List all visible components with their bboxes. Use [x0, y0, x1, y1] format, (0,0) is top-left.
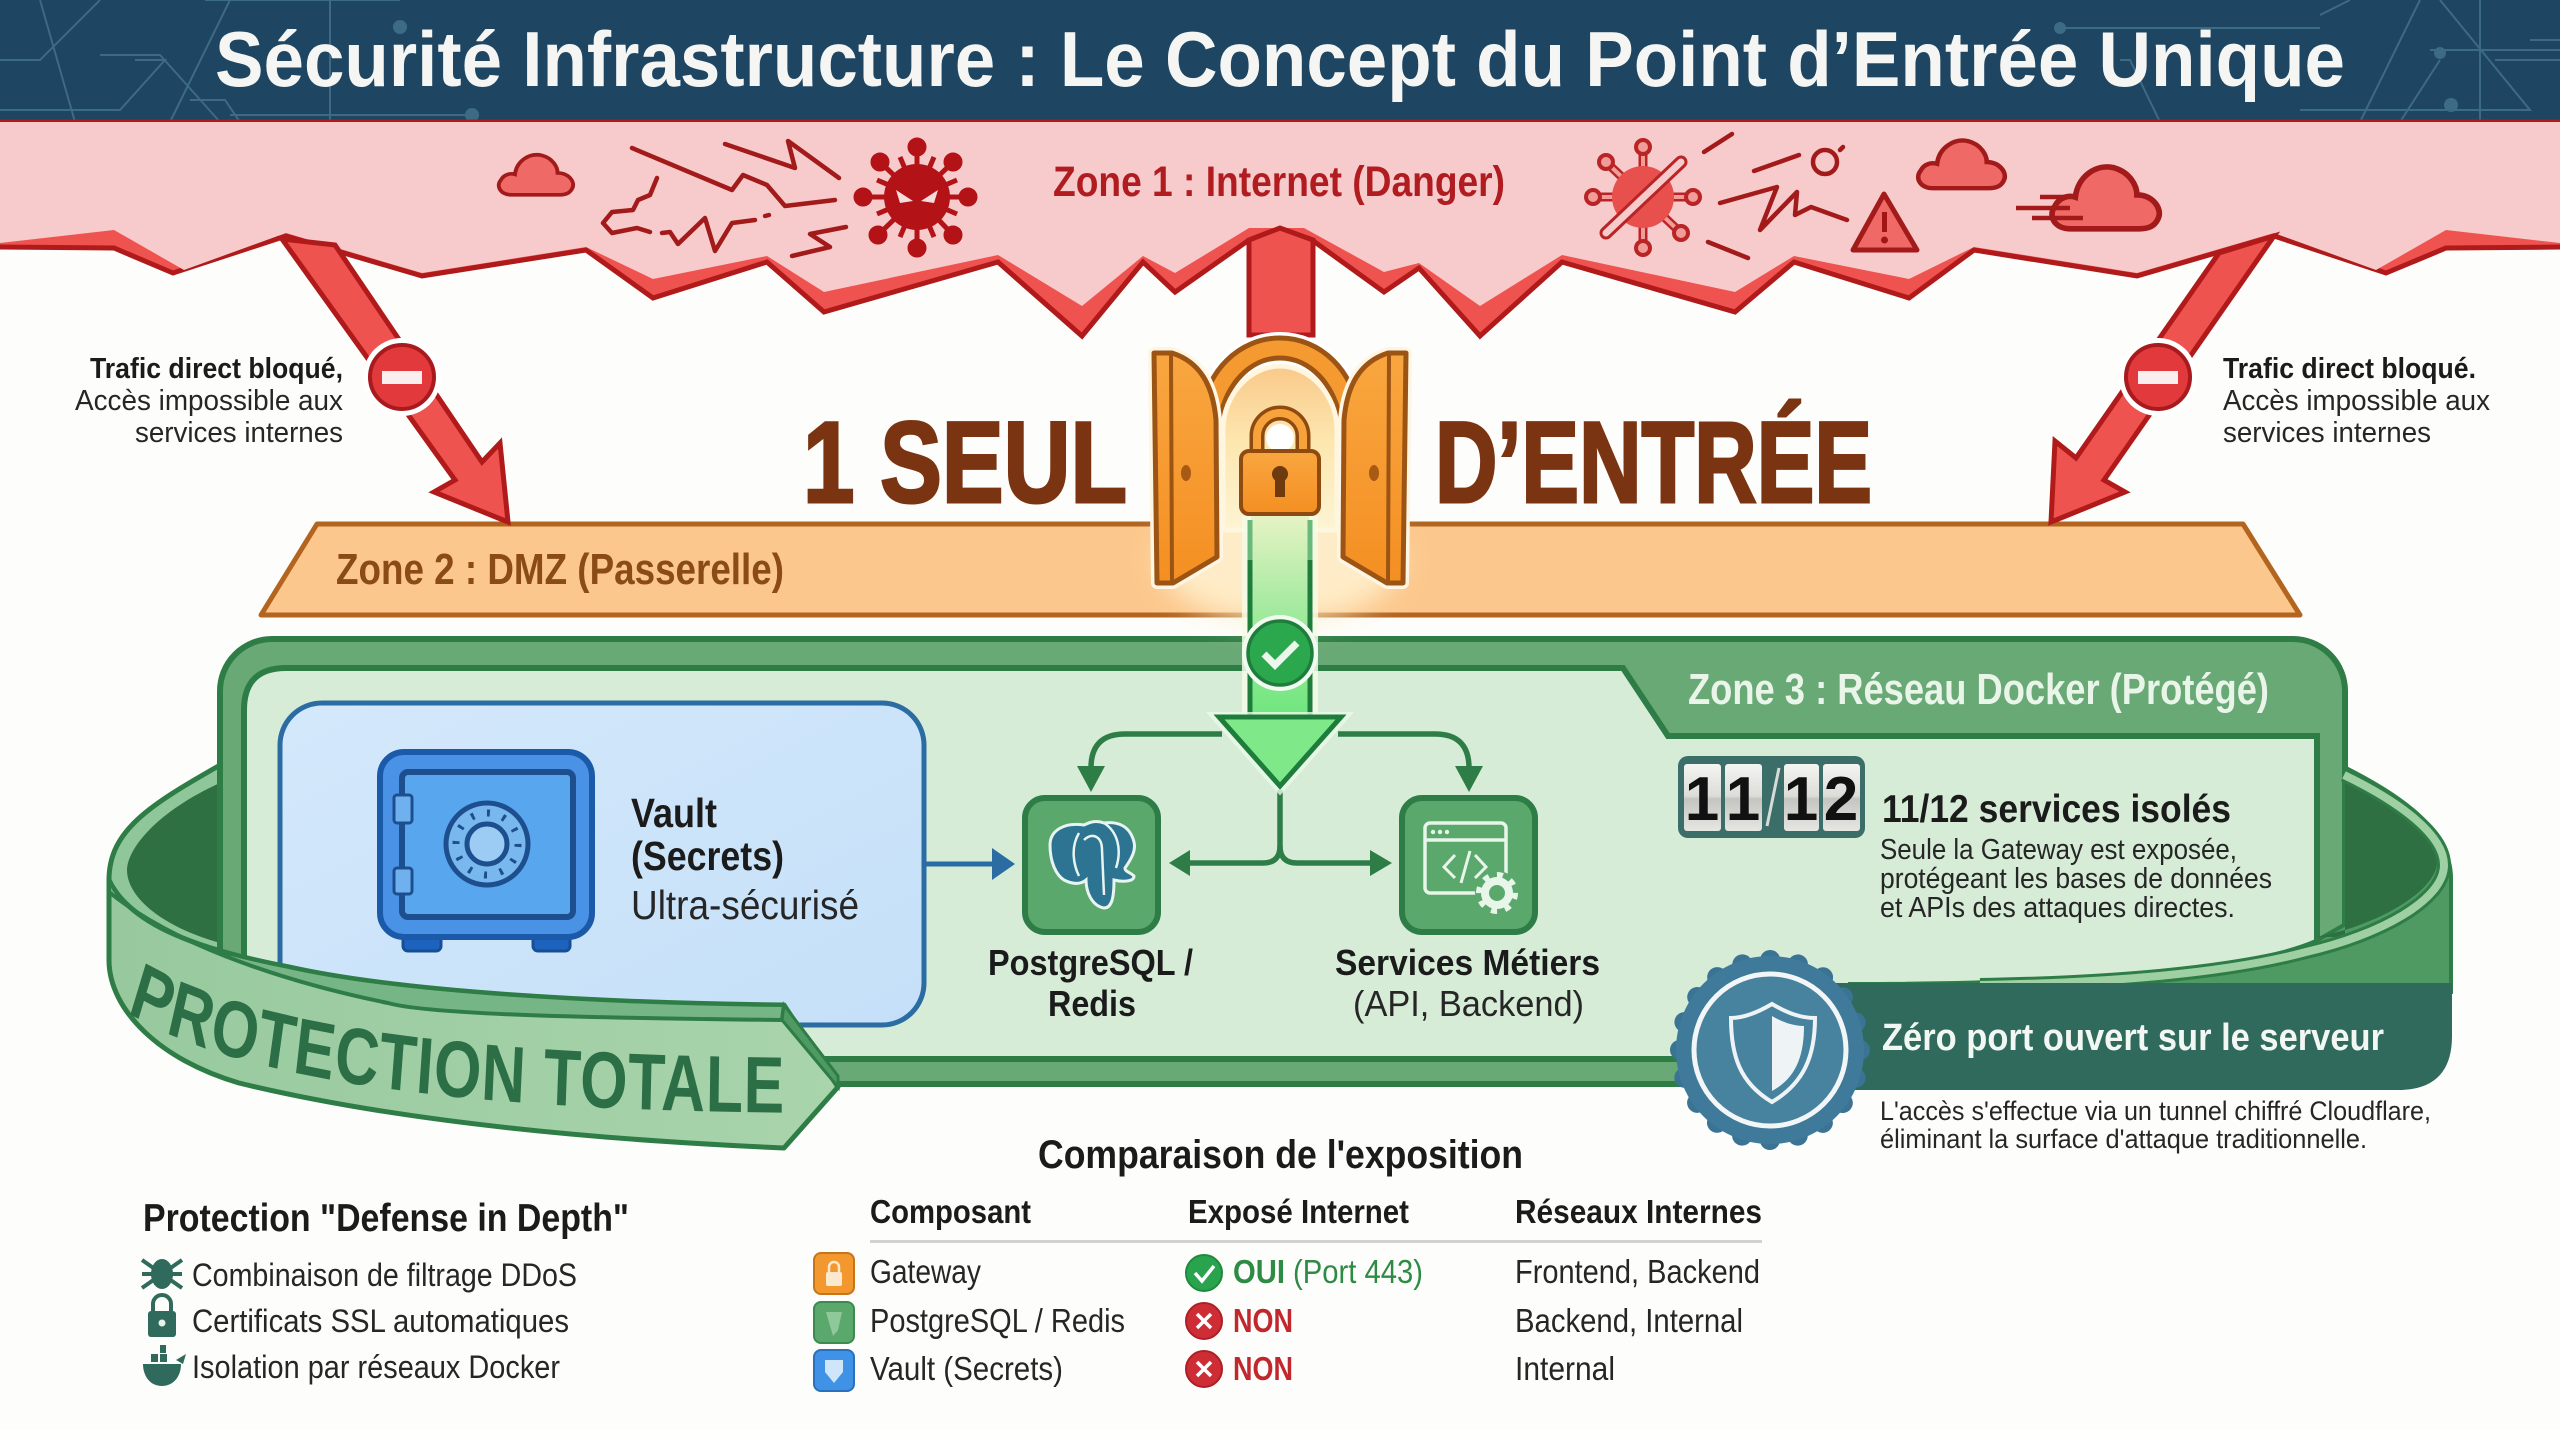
text: services isolated: Seule la Gateway est exposée,: [1880, 834, 2237, 866]
text: zero port: Zéro port ouvert sur le serveur: [1882, 1017, 2384, 1059]
band body: [1850, 767, 2451, 992]
icon: attack lightning scribbles left: [603, 141, 846, 256]
lock: [1257, 413, 1303, 452]
arch white halo: [1200, 338, 1360, 420]
row: gateway: OUI (Port 443): [1233, 1253, 1423, 1290]
icon: ddos filter: [142, 1259, 182, 1289]
text: vault label: [631, 790, 859, 928]
icon: check badge: [1242, 615, 1318, 691]
text: blocked note right: Accès impossible aux: [2223, 385, 2490, 417]
door halo: [1154, 353, 1217, 583]
row: postgres: PostgreSQL / Redis: [870, 1302, 1125, 1339]
arch: [1200, 338, 1360, 420]
glow inside gateway: [1160, 498, 1400, 622]
panel: vault: [280, 703, 924, 1025]
text: vault label: (Secrets): [631, 833, 784, 879]
row: vault: Vault (Secrets): [870, 1350, 1063, 1387]
arrow: blocked traffic right: [2051, 236, 2274, 522]
heading: 1 seul: 1 SEUL: [803, 399, 1127, 527]
icon: docker whale: [143, 1345, 186, 1386]
text: tunnel note: [1880, 1096, 2431, 1154]
text: services label: (API, Backend): [1353, 983, 1584, 1024]
text: postgres label: Redis: [1048, 983, 1136, 1024]
row: gateway: Gateway: [870, 1253, 981, 1290]
icon: no entry right: [2119, 338, 2197, 416]
text: blocked note right: Trafic direct bloqué.: [2223, 353, 2476, 385]
table header: [870, 1193, 1762, 1243]
text: vault label: Vault: [631, 790, 717, 836]
text: services isolated: [1880, 788, 2272, 924]
panel: zone 3 frame and back ribbon: [109, 639, 2345, 1084]
text: docker: Isolation par réseaux Docker: [192, 1349, 560, 1385]
icon: no entry left: [363, 338, 441, 416]
arch inner glow: [1223, 366, 1337, 530]
text: services label: [1335, 942, 1600, 1024]
row: vault: NON: [1233, 1350, 1293, 1387]
text: vault label: Ultra-sécurisé: [631, 882, 859, 928]
row: postgres: NON: [1233, 1302, 1293, 1339]
icon: shield badge: [1676, 956, 1864, 1144]
icon: flip counter 11/12: 1: [1726, 765, 1760, 834]
icon: code window and gear: [1425, 823, 1519, 915]
panel: zero port band: [1800, 983, 2452, 1090]
ribbon: protection totale front band: [106, 880, 840, 1150]
arrow: central red entry: [1249, 228, 1313, 335]
icon: flip counter 11/12: [1678, 756, 1865, 838]
text: postgres label: PostgreSQL /: [988, 942, 1193, 983]
arrow: green connectors: [1077, 734, 1483, 876]
arrow: green entry head: [1217, 717, 1343, 788]
icon: warning triangle: [1853, 194, 1917, 250]
heading: zone 2: Zone 2 : DMZ (Passerelle): [336, 545, 784, 594]
ribbon: right sweep: [1850, 767, 2451, 992]
row: postgres: [814, 1302, 1743, 1343]
icon: flip counter 11/12: 2: [1824, 765, 1858, 834]
row: postgres: Backend, Internal: [1515, 1302, 1743, 1339]
table: comparison: [814, 1193, 1762, 1391]
icon: elephant: [1050, 822, 1135, 908]
table header: Exposé Internet: [1188, 1193, 1409, 1230]
row: vault: Internal: [1515, 1350, 1615, 1387]
panel: services: [1335, 798, 1600, 1024]
heading: d'entrée: D’ENTRÉE: [1435, 399, 1872, 527]
text: tunnel note: éliminant la surface d'attaque traditionnelle.: [1880, 1124, 2367, 1154]
door right: [1343, 353, 1406, 583]
panel: postgres: [988, 798, 1193, 1024]
panel: defense in depth: [142, 1197, 629, 1386]
arrow: vault to postgres: [924, 848, 1015, 880]
text: postgres label: [988, 942, 1193, 1024]
row: gateway: [814, 1253, 1760, 1294]
table header: Composant: [870, 1193, 1031, 1230]
icon: gateway arch with doors and lock: [1154, 338, 1406, 720]
panel: zone 2 DMZ: [261, 524, 2300, 615]
outer frame: [220, 639, 2345, 1084]
icon: cloud left: [499, 155, 573, 195]
table header: Réseaux Internes: [1515, 1193, 1762, 1230]
band interior: [2316, 783, 2437, 937]
title: Sécurité Infrastructure : Le Concept du Point d’Entrée Unique: [215, 15, 2345, 103]
green beam: [1242, 516, 1318, 720]
text: protection totale: PROTECTION TOTALE: [130, 964, 782, 1113]
text: blocked note right: [2223, 353, 2490, 449]
door left: [1154, 353, 1217, 583]
icon: crossed-out virus: [1586, 140, 1700, 255]
heading: zone 1: Zone 1 : Internet (Danger): [1053, 158, 1505, 206]
icon: safe: [380, 752, 592, 951]
text: ssl: Certificats SSL automatiques: [192, 1303, 569, 1339]
text: services isolated: et APIs des attaques directes.: [1880, 892, 2235, 924]
icon: flip counter 11/12: 1: [1784, 765, 1818, 834]
icon: angry virus: [856, 140, 975, 255]
text: services label: Services Métiers: [1335, 942, 1600, 983]
row: gateway: Frontend, Backend: [1515, 1253, 1760, 1290]
arrow: blocked traffic left: [282, 239, 508, 522]
icon: ssl lock: [148, 1295, 176, 1337]
text: blocked note left: Accès impossible aux: [75, 385, 343, 417]
text: services isolated: 11/12 services isolés: [1882, 788, 2231, 831]
icon: cloud right: [1918, 141, 2005, 188]
icon: attack scribbles right: [1704, 134, 1847, 258]
heading: comparison: Comparaison de l'exposition: [1038, 1133, 1523, 1177]
band stripe: [1980, 775, 2444, 985]
text: blocked note left: Trafic direct bloqué,: [90, 353, 343, 385]
row: vault: [814, 1350, 1615, 1391]
panel: zone 1 internet jagged band: [0, 122, 2560, 336]
text: blocked note left: [75, 353, 343, 449]
inner frame: [244, 668, 2317, 1059]
text: blocked note right: services internes: [2223, 417, 2431, 449]
text: tunnel note: L'accès s'effectue via un tunnel chiffré Cloudflare,: [1880, 1096, 2431, 1126]
text: ddos: Combinaison de filtrage DDoS: [192, 1257, 577, 1293]
icon: fast cloud: [2016, 167, 2159, 229]
heading: defense in depth: Protection "Defense in Depth": [143, 1197, 629, 1240]
back ribbon left: [109, 764, 250, 1000]
text: services isolated: protégeant les bases de données: [1880, 863, 2272, 895]
heading: zone 3: Zone 3 : Réseau Docker (Protégé): [1688, 665, 2269, 714]
panel: title banner: [0, 0, 2560, 122]
text: blocked note left: services internes: [135, 417, 343, 449]
icon: flip counter 11/12: 1: [1685, 765, 1719, 834]
